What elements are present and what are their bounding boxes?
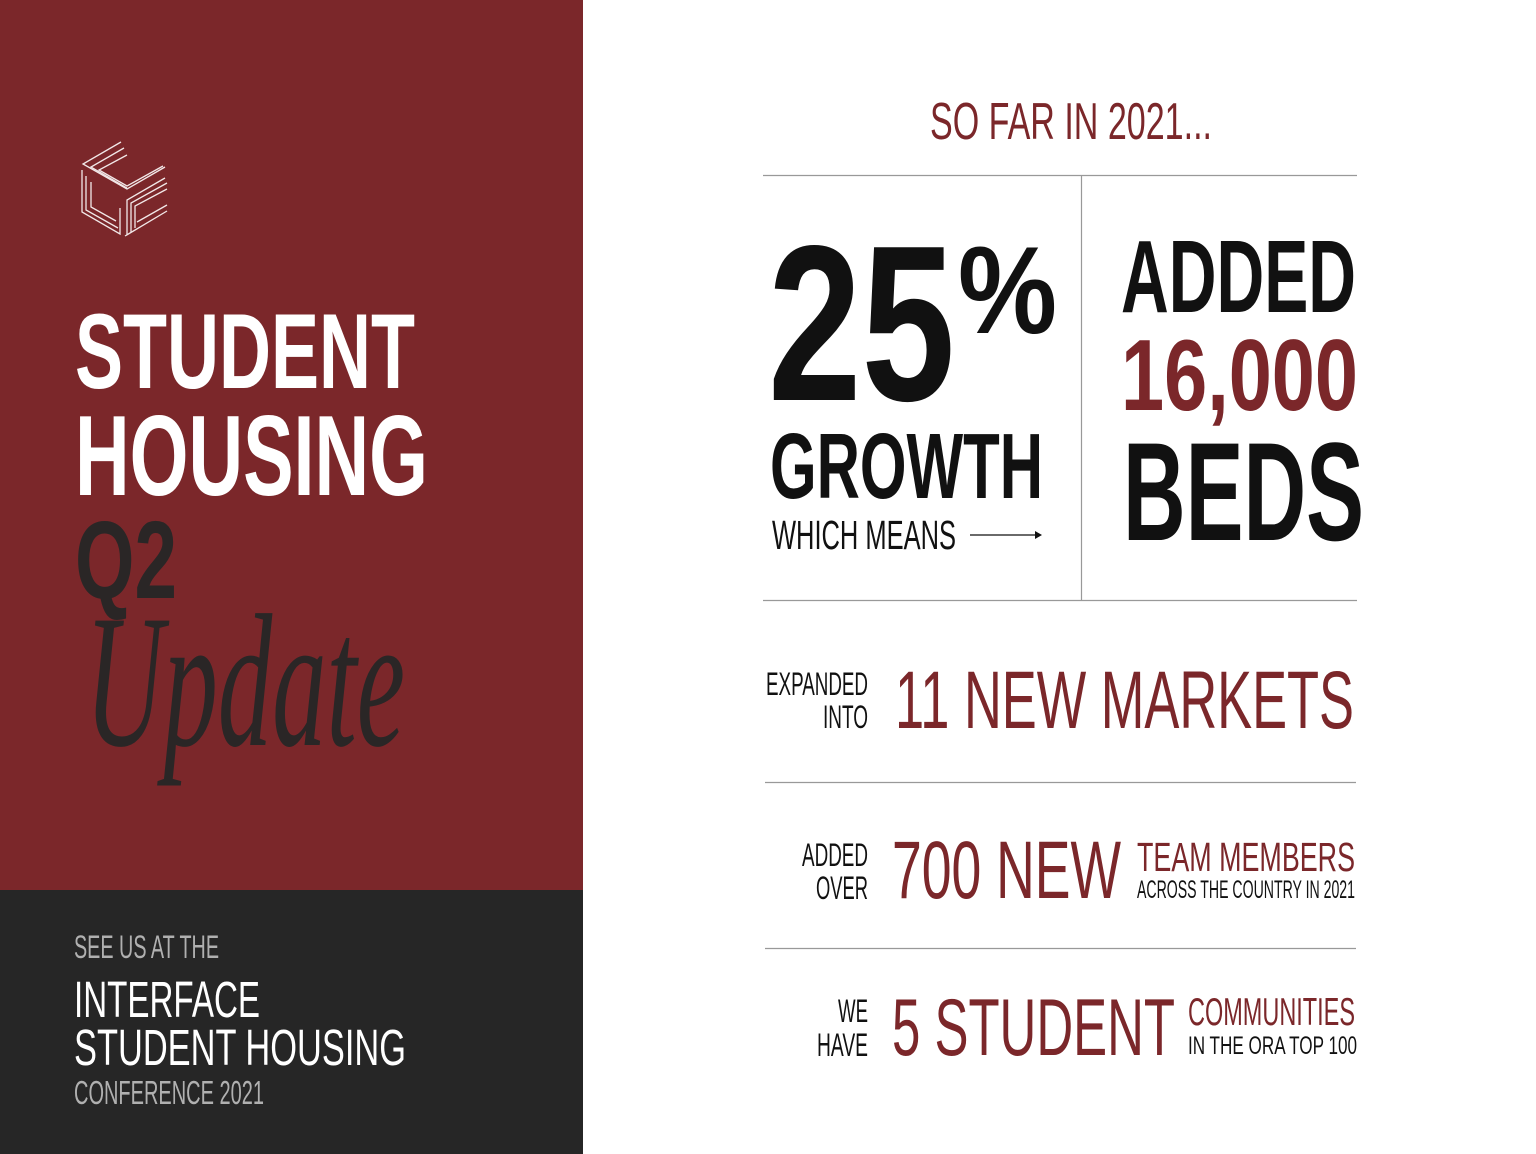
text block: conference: CONFERENCE 2021	[74, 1074, 264, 1111]
stat: new markets: EXPANDED	[766, 666, 868, 702]
text block: conference: STUDENT HOUSING	[74, 1019, 406, 1076]
stat: team members: ADDED	[802, 837, 868, 873]
panel: bottom dark	[0, 890, 583, 1154]
stat: added 16,000 beds: 16,000	[1121, 320, 1358, 432]
panel: left red	[0, 0, 583, 890]
stat: team members: 700 NEW	[892, 825, 1121, 916]
icon: logo	[82, 142, 167, 236]
stat: 25% growth: 25	[768, 200, 955, 448]
text block: conference	[74, 929, 406, 1111]
stat: student communities: 5 STUDENT	[892, 983, 1175, 1073]
stat: team members	[802, 825, 1355, 916]
stat: student communities: COMMUNITIES	[1188, 991, 1355, 1034]
stat: team members: OVER	[816, 870, 868, 906]
stat: team members: TEAM MEMBERS	[1137, 834, 1355, 880]
heading: so far in 2021: SO FAR IN 2021...	[930, 93, 1212, 151]
text block: conference: SEE US AT THE	[74, 929, 219, 965]
stat: student communities: WE	[838, 993, 868, 1029]
stat: added 16,000 beds: BEDS	[1123, 413, 1364, 570]
stat: added 16,000 beds	[1121, 219, 1364, 570]
title: student housing: HOUSING	[75, 393, 428, 520]
stat: 25% growth: GROWTH	[770, 414, 1043, 518]
arrow	[970, 531, 1042, 539]
stat: 25% growth: WHICH MEANS	[772, 512, 956, 558]
stat: 25% growth	[768, 200, 1057, 558]
stat: new markets: INTO	[823, 699, 868, 735]
stat: student communities: HAVE	[817, 1027, 868, 1063]
stat: added 16,000 beds: ADDED	[1121, 219, 1356, 334]
stat: team members: ACROSS THE COUNTRY IN 2021	[1137, 876, 1355, 904]
stat: 25% growth: %	[958, 222, 1057, 360]
title: student housing	[75, 291, 428, 520]
title: student housing: STUDENT	[75, 291, 415, 411]
stat: student communities: IN THE ORA TOP 100	[1188, 1032, 1357, 1060]
title: Q2: Q2	[75, 499, 177, 622]
title: Update script: Update	[85, 577, 405, 787]
text block: conference: INTERFACE	[74, 971, 260, 1028]
stat: new markets	[766, 655, 1354, 746]
